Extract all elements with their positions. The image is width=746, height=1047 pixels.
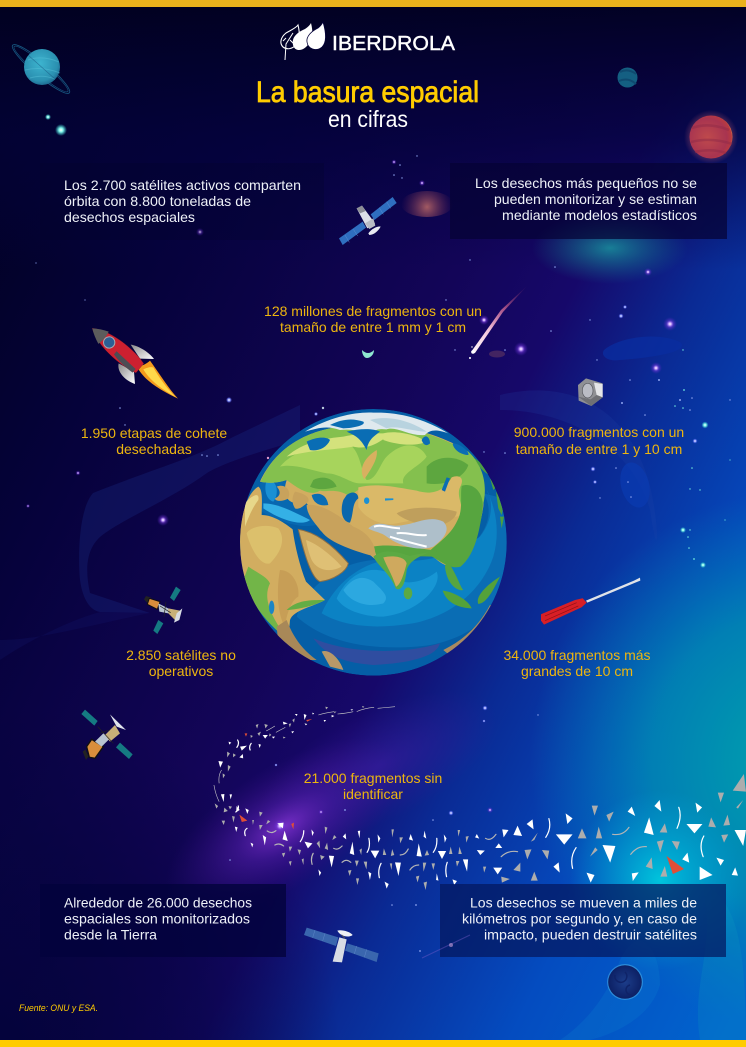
ocean (240, 409, 507, 676)
text: 34.000: grandes de 10 cm (521, 663, 633, 679)
text: 900.000: tamaño de entre 1 y 10 cm (516, 441, 682, 457)
panel: smallest debris: Los desechos más pequeños no se (475, 175, 697, 191)
debris trail (214, 706, 746, 890)
panel: monitored debris: espaciales son monitorizados (64, 910, 250, 926)
north green (261, 424, 485, 510)
panel: debris speed (422, 884, 726, 958)
panel: debris speed: kilómetros por segundo y, en caso de (462, 910, 697, 926)
panel: smallest debris (450, 163, 727, 239)
text: 2.850: 2.850 satélites no (126, 647, 236, 663)
planet: ringed (8, 40, 74, 98)
title: La basura espacial (256, 76, 479, 109)
text: rocket stages: 1.950 etapas de cohete (81, 425, 227, 441)
India (373, 554, 420, 590)
text: rocket stages: desechadas (116, 441, 192, 457)
title (256, 76, 479, 132)
panel: smallest debris: pueden monitorizar y se estiman (494, 191, 697, 207)
icon: comet (469, 285, 528, 359)
text: 34.000 (503, 647, 651, 679)
text: rocket stages (81, 425, 227, 457)
icon: small satellite (144, 587, 182, 634)
Persia tan (307, 505, 375, 557)
Himalaya (368, 519, 447, 549)
Caspian (342, 493, 358, 523)
lakes, seas north (453, 443, 468, 455)
text: 128 million (264, 303, 482, 335)
Arabia (298, 529, 348, 582)
icon: bottom satellite (304, 928, 379, 962)
icon: small fragment (362, 350, 374, 358)
Black Sea (312, 494, 328, 505)
icon: rocket (87, 321, 178, 399)
text: 2.850: operativos (149, 663, 213, 679)
planet: small teal (618, 68, 638, 88)
South Himalaya green (373, 546, 437, 557)
central Asia deserts (358, 476, 463, 524)
panel: smallest debris: mediante modelos estadísticos (502, 207, 697, 223)
panel: monitored debris: Alrededor de 26.000 desechos (64, 894, 252, 910)
faint smoke shapes (79, 405, 300, 613)
panel: monitored debris: desde la Tierra (64, 926, 157, 942)
thin far arcs (214, 707, 395, 802)
panel: active satellites (40, 163, 324, 240)
snow (305, 413, 448, 437)
panel: monitored debris (40, 884, 286, 957)
text: 2.850 (126, 647, 236, 679)
Europe peninsulas (275, 486, 289, 501)
logo: IBERDROLA (332, 33, 456, 55)
text: 21.000: identificar (343, 786, 403, 802)
Africa (240, 487, 325, 640)
Eurasia tan (260, 428, 484, 566)
text: 128 million: tamaño de entre 1 mm y 1 cm (280, 319, 466, 335)
white fragments (218, 709, 746, 889)
gray fragments (215, 706, 746, 890)
SE Asia green (427, 485, 483, 567)
icon: nut (578, 378, 603, 406)
icon: top satellite (339, 197, 397, 245)
text: 900.000: 900.000 fragmentos con un (514, 424, 684, 440)
logo (281, 22, 456, 60)
Mediterranean (260, 480, 316, 526)
source note: Fuente: ONU y ESA. (19, 1003, 98, 1014)
text: 21.000: 21.000 fragmentos sin (304, 770, 442, 786)
nebula: small (489, 350, 505, 358)
red fragments (239, 719, 684, 874)
text: 128 million: 128 millones de fragmentos con un (264, 303, 482, 319)
icon: leaves (281, 22, 326, 60)
icon: screwdriver (541, 578, 640, 625)
planet: dark blue (607, 964, 643, 1000)
globe (240, 409, 510, 676)
text: 34.000: 34.000 fragmentos más (503, 647, 651, 663)
icon: large satellite (81, 710, 133, 760)
bottom bar (0, 1040, 746, 1047)
panel: active satellites: desechos espaciales (64, 209, 195, 225)
stars (26, 114, 731, 952)
panel: active satellites: órbita con 8.800 toneladas de (64, 193, 251, 209)
planet: red (684, 110, 738, 164)
top bar (0, 0, 746, 7)
white arcs (236, 740, 704, 878)
title: en cifras (328, 106, 408, 132)
gray arcs (267, 827, 646, 870)
text: 21.000 (304, 770, 442, 802)
panel: active satellites: Los 2.700 satélites activos comparten (64, 177, 301, 193)
Indochina islands (443, 591, 472, 608)
panel: debris speed: impacto, pueden destruir satélites (484, 926, 697, 942)
Urals ridge (362, 450, 377, 479)
bottom land (277, 620, 317, 660)
text: 900.000 (514, 424, 684, 457)
panel: debris speed: Los desechos se mueven a miles de (470, 894, 697, 910)
